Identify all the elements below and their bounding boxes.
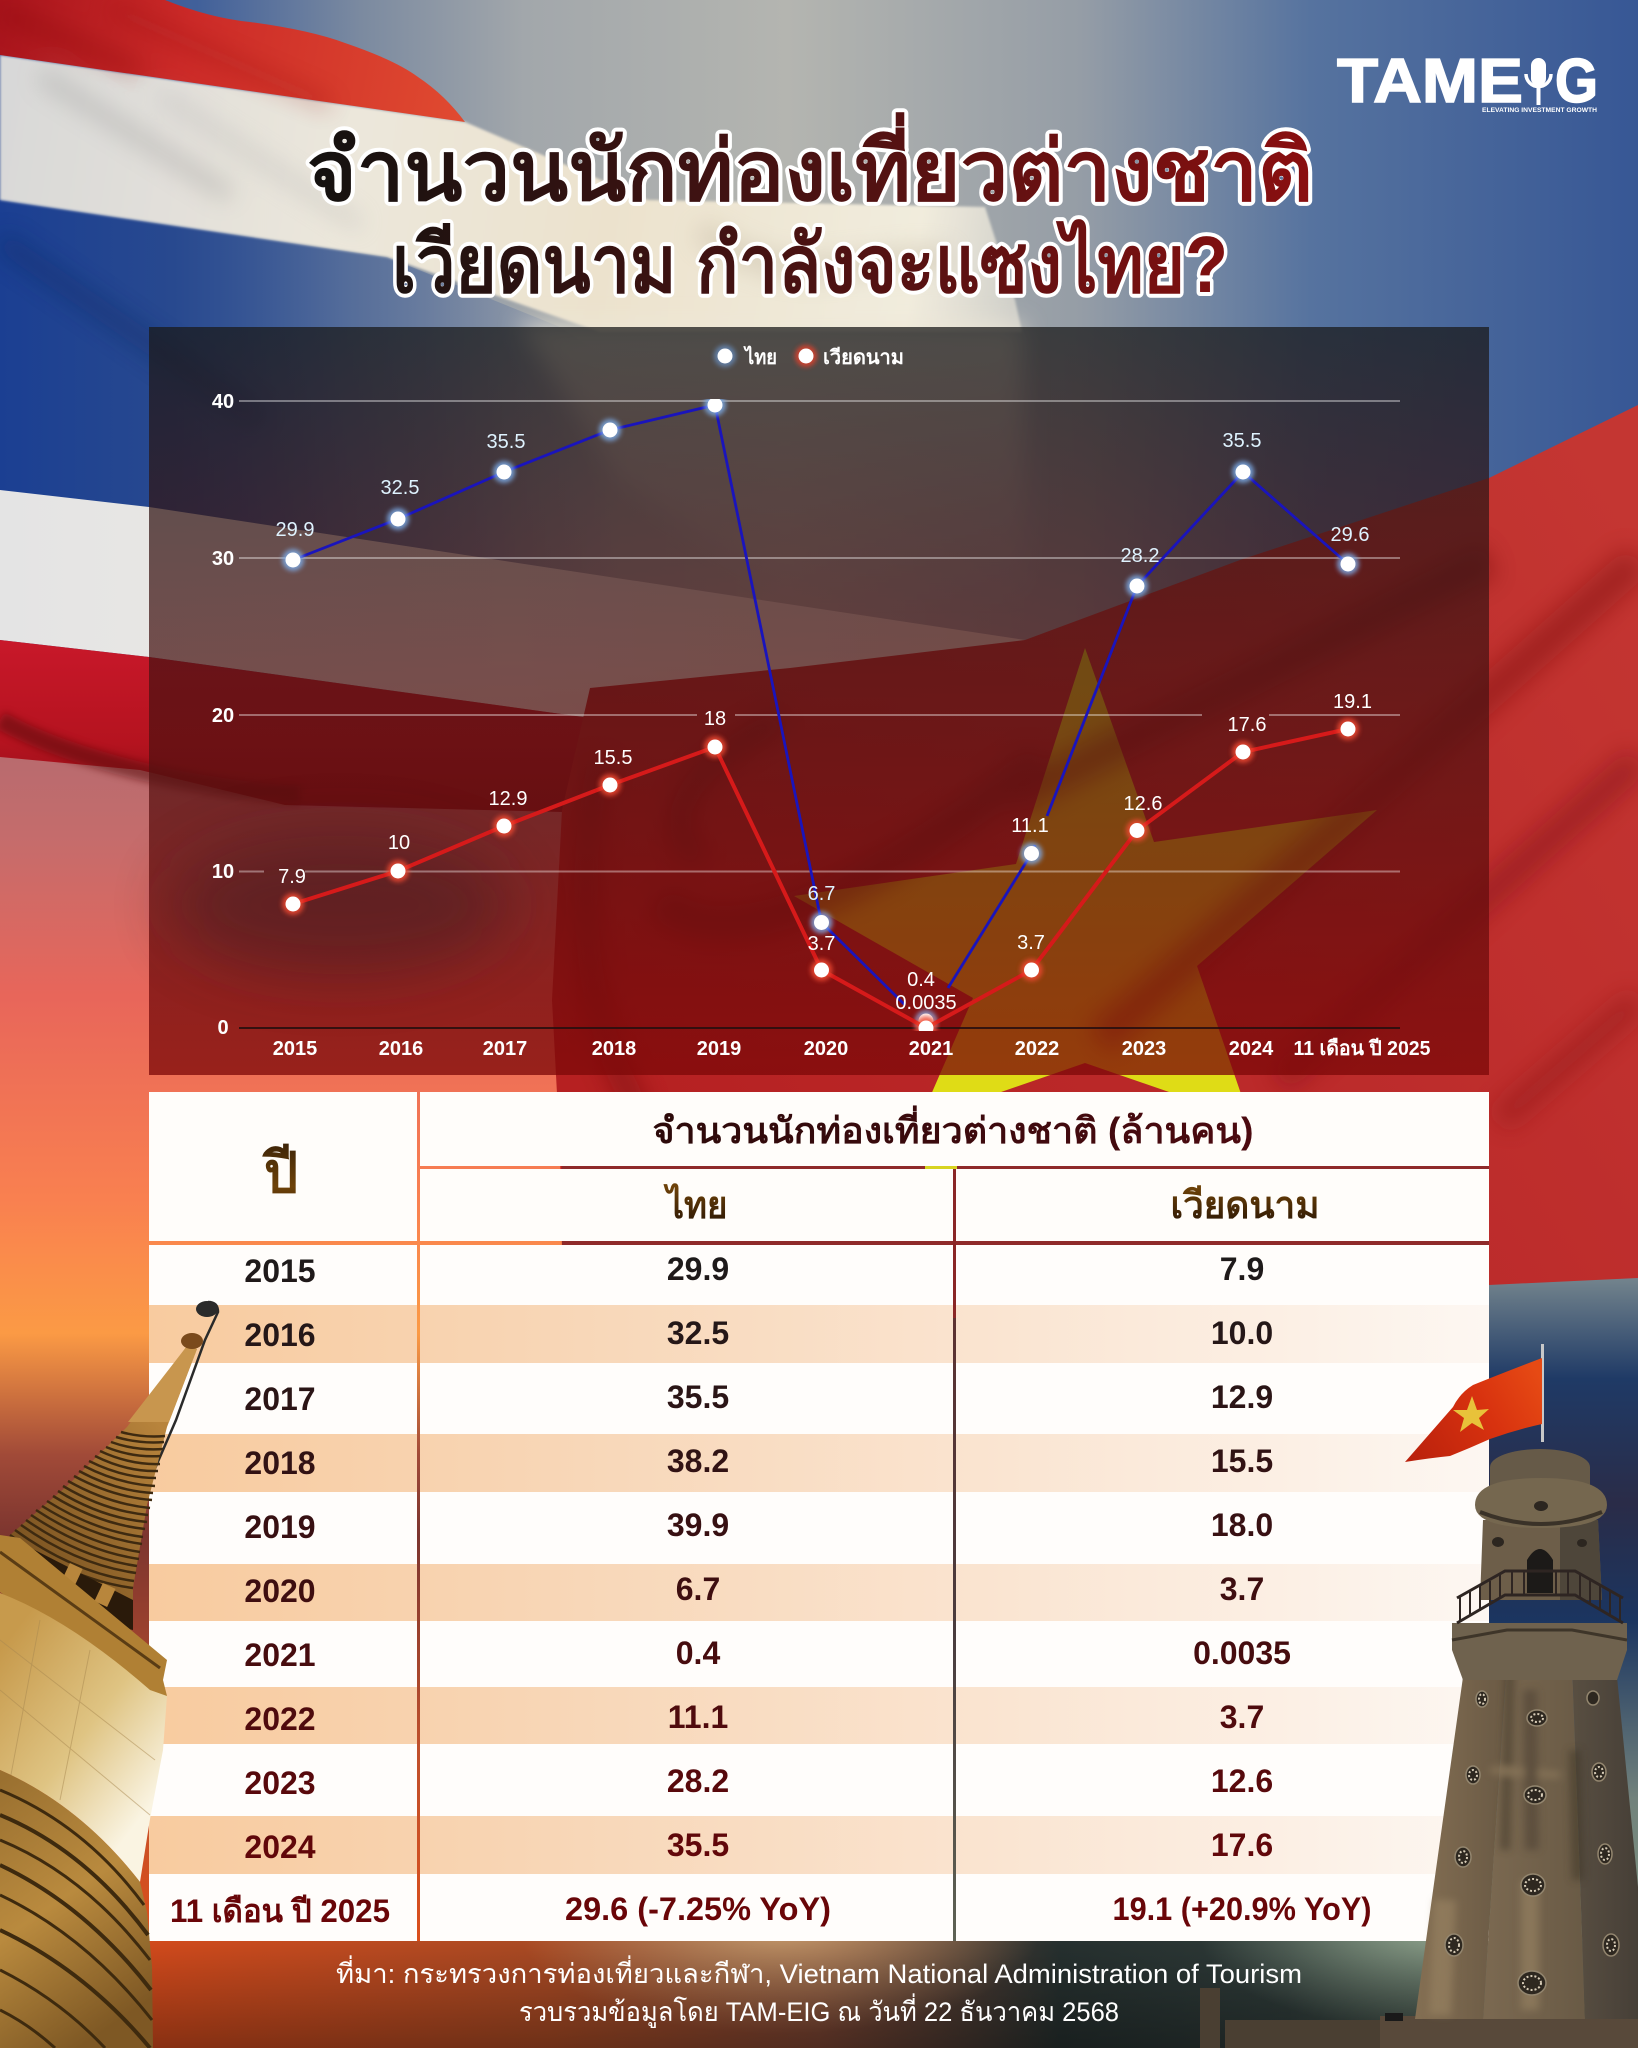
x axis labels [273,1037,1430,1060]
data labels: Vietnam: 18 [704,708,726,730]
Vietnam flag [552,405,1638,1318]
title: จำนวนนักท่องเที่ยวต่างชาติ [307,112,1313,218]
table Vietnam column: 7.9 [1220,1251,1264,1287]
x axis labels: 2019 [697,1038,741,1060]
table Vietnam column: 10.0 [1211,1315,1273,1351]
data labels: Thailand: 28.2 [1121,545,1159,567]
table Thailand column: 11.1 [668,1699,728,1735]
table header text: ไทย [663,1183,728,1227]
source footer: รวบรวมข้อมูลโดย TAM-EIG ณ วันที่ 22 ธันวาคม 2568 [519,1993,1119,2028]
table year column: 2016 [244,1317,316,1353]
data labels: Vietnam: 12.9 [489,788,527,810]
table Thailand column: 35.5 [667,1827,729,1863]
data labels: Thailand: 0.4 [907,969,935,991]
legend [714,345,904,369]
x axis labels: 2015 [273,1038,317,1060]
table header text: จำนวนนักท่องเที่ยวต่างชาติ (ล้านคน) [652,1105,1254,1151]
data labels: Thailand: 6.7 [808,883,835,905]
data labels: Vietnam: 10 [388,832,410,854]
data labels: Thailand: 35.5 [1223,430,1261,452]
data labels: Thailand: 29.9 [276,519,314,541]
table year column [170,1253,390,1929]
table Vietnam column: 3.7 [1220,1699,1264,1735]
chart gridlines [239,401,1400,1028]
table Thailand column: 28.2 [667,1763,729,1799]
door [1527,1549,1553,1593]
x axis labels: 2023 [1122,1038,1166,1060]
x axis labels: 11 เดือน ปี 2025 [1294,1037,1430,1060]
table Thailand column: 32.5 [667,1315,729,1351]
lightning rod [143,1301,218,1512]
y axis labels: 30 [212,548,234,570]
table [149,1092,1489,1941]
chart panel [149,327,1489,1075]
flagpole [1541,1344,1544,1442]
y axis labels: 10 [212,861,234,883]
flag on tower [1405,1358,1542,1462]
table Thailand column [565,1251,831,1927]
table Thailand column: 29.9 [667,1251,729,1287]
table dividers tint [562,1166,1489,1941]
legend: เวียดนาม [823,346,904,369]
table Vietnam column: 17.6 [1211,1827,1273,1863]
table Vietnam column: 15.5 [1211,1443,1273,1479]
table Vietnam column: 18.0 [1211,1507,1273,1543]
table Vietnam column: 12.6 [1211,1763,1273,1799]
data labels: Vietnam [278,691,1372,1014]
table year column: 2020 [244,1573,316,1609]
data labels: Vietnam: 15.5 [594,747,632,769]
table Thailand column: 0.4 [676,1635,720,1671]
table Vietnam column: 3.7 [1220,1571,1264,1607]
table Thailand column: 35.5 [667,1379,729,1415]
logo [1337,47,1598,116]
x axis labels: 2020 [804,1038,848,1060]
table Vietnam column: 0.0035 [1193,1635,1291,1671]
tower body [1415,1660,1638,2019]
table year column: 2018 [244,1445,316,1481]
yellow star [794,648,1377,1120]
dome [0,1593,167,1882]
source footer: ที่มา: กระทรวงการท่องเที่ยวและกีฬา, Vietnam National Administration of Tourism [336,1955,1302,1989]
illustration: Vietnam flag tower [1200,1344,1638,2048]
x axis labels: 2017 [483,1038,527,1060]
data labels: Vietnam: 17.6 [1228,714,1266,736]
base rings [0,1770,153,2048]
data labels: Thailand: 29.6 [1331,524,1369,546]
data labels: Vietnam: 12.6 [1124,793,1162,815]
logo: TAME [1337,47,1523,116]
table Thailand column: 39.9 [667,1507,729,1543]
y axis labels: 40 [212,391,234,413]
table Vietnam column [1112,1251,1372,1927]
line series: Vietnam [282,718,1359,1038]
flag star [1453,1396,1489,1432]
table year column: 2024 [244,1829,316,1865]
illustration: golden stupa [0,1301,218,2048]
data labels: Vietnam: 7.9 [278,866,306,888]
data labels: Vietnam: 0.0035 [895,992,957,1014]
table header text [262,1105,1320,1227]
table Thailand column: 38.2 [667,1443,729,1479]
table header cells [149,1092,1489,1241]
table year column: 2017 [244,1381,316,1417]
tower drum [1475,1449,1607,1600]
table year column: 2021 [244,1637,316,1673]
data labels: Thailand: 11.1 [1011,815,1049,837]
source footer [336,1955,1302,2028]
table year column: 2015 [244,1253,316,1289]
data labels: Thailand [276,430,1369,991]
table Thailand column: 29.6 (-7.25% YoY) [565,1891,831,1927]
balcony railing [1457,1571,1623,1623]
tower balcony [1452,1623,1627,1680]
logo: G [1555,47,1598,116]
title [307,112,1313,309]
y axis labels: 20 [212,705,234,727]
data labels: Vietnam: 3.7 [1017,932,1045,954]
spire [10,1333,203,1630]
platform [0,1535,167,1700]
Thai flag [0,0,1025,812]
data labels: Vietnam: 3.7 [808,933,835,955]
table year column: 2023 [244,1765,316,1801]
x axis labels: 2016 [379,1038,423,1060]
table Thailand column: 6.7 [676,1571,720,1607]
table Vietnam column: 12.9 [1211,1379,1273,1415]
alcove with columns [25,1545,133,1630]
table year column: 2019 [244,1509,316,1545]
table Vietnam column: 19.1 (+20.9% YoY) [1112,1891,1372,1927]
tower window rosettes [1445,1691,1619,1995]
line series: Thailand [282,394,1359,1032]
title: เวียดนาม กำลังจะแซงไทย? [392,218,1228,309]
parapet wall [1200,1988,1638,2048]
table year column: 11 เดือน ปี 2025 [170,1893,390,1929]
x axis labels: 2024 [1229,1038,1274,1060]
icon: microphone [1526,58,1551,105]
legend: ไทย [743,345,777,369]
table header text: ปี [262,1141,298,1204]
x axis labels: 2018 [592,1038,636,1060]
data labels: Vietnam: 19.1 [1333,691,1372,713]
y axis labels: 0 [217,1017,229,1039]
data labels: Thailand: 32.5 [381,477,419,499]
table rows background [149,1245,1489,1941]
table year column: 2022 [244,1701,316,1737]
y axis labels [212,391,234,1039]
x axis labels: 2022 [1015,1038,1059,1060]
logo: ELEVATING INVESTMENT GROWTH [1482,107,1597,114]
x axis labels: 2021 [909,1038,953,1060]
data labels: Thailand: 35.5 [487,431,525,453]
table header text: เวียดนาม [1170,1185,1320,1227]
